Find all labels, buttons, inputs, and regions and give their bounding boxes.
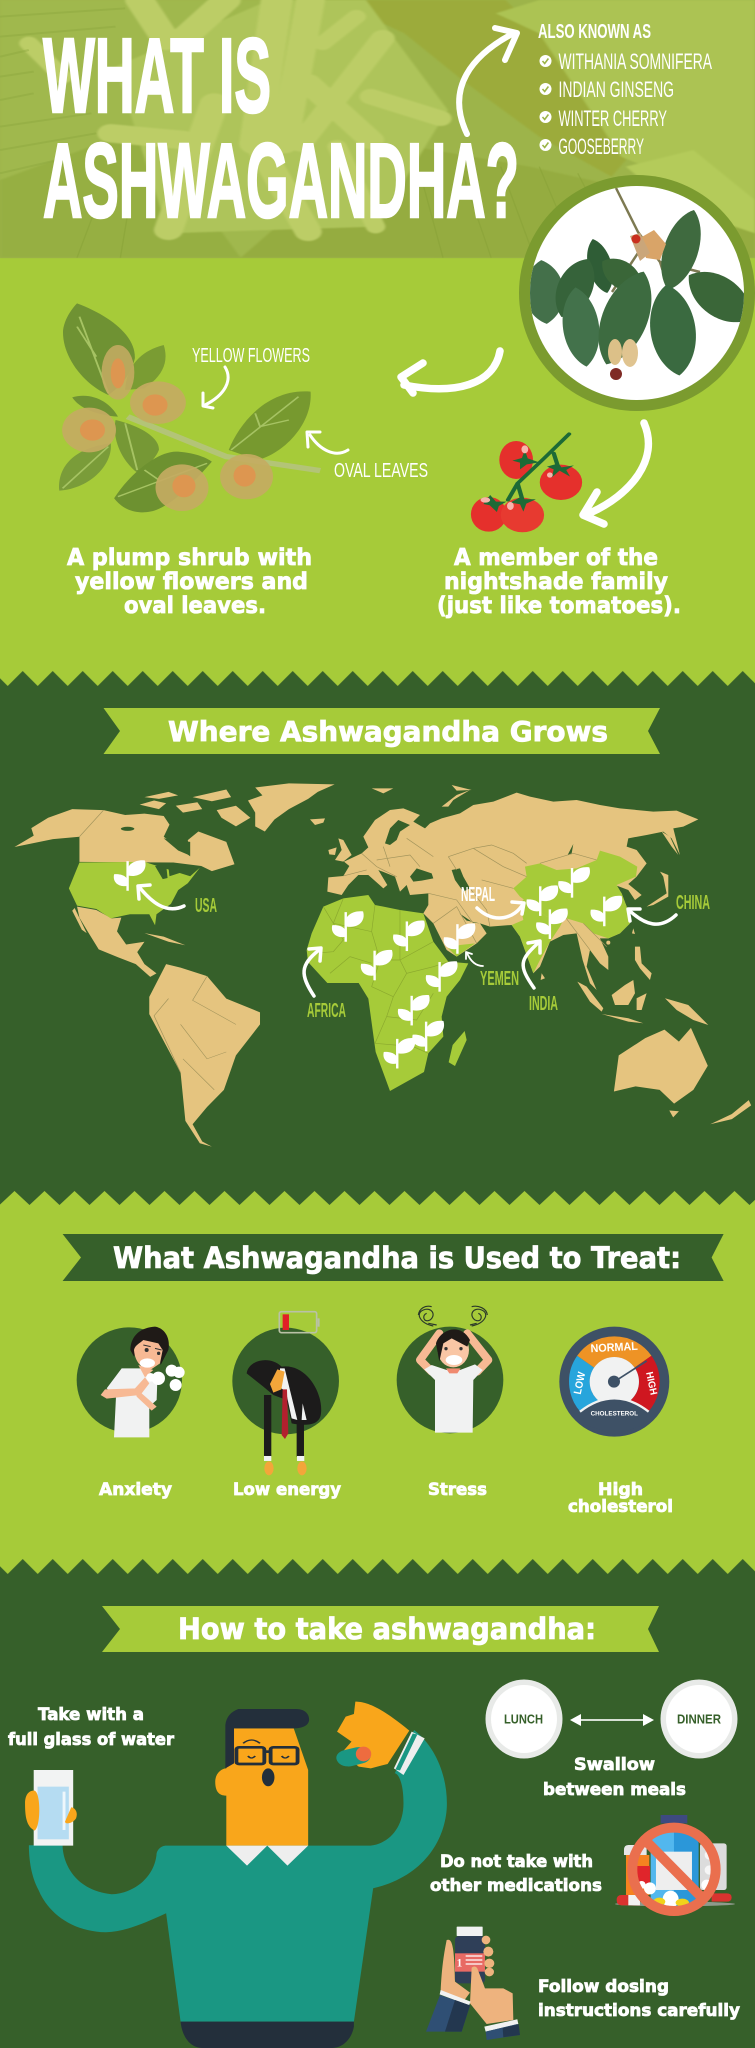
treatment labels: Stress — [428, 1480, 487, 1500]
highlighted: africa — [307, 895, 468, 1091]
label: oval leaves — [307, 432, 428, 482]
treatment labels: cholesterol — [568, 1497, 673, 1517]
treatment labels: High — [598, 1480, 643, 1500]
text: follow dosing instructions: Follow dosing — [538, 1977, 669, 1997]
madagascar — [449, 1031, 467, 1066]
panel: where it grows background — [0, 671, 755, 1205]
hand and pill — [337, 1702, 409, 1768]
highlighted: yemen — [448, 943, 475, 957]
banner: where ashwagandha grows: Where Ashwagandha Grows — [168, 715, 608, 748]
text: swallow between meals: between meals — [543, 1780, 686, 1800]
banner: what ashwagandha is used to treat: What Ashwagandha is Used to Treat: — [113, 1241, 681, 1275]
text: plump shrub — [67, 545, 312, 619]
map labels: INDIA — [529, 993, 558, 1015]
name: indian ginseng — [540, 77, 674, 102]
map labels: NEPAL — [461, 884, 495, 906]
text: full glass of water: Take with a — [38, 1705, 144, 1725]
map labels: YEMEN — [480, 968, 519, 990]
arrow: to tomatoes — [583, 423, 648, 524]
text: follow dosing instructions: instructions carefully — [538, 2001, 740, 2021]
plate: lunch — [486, 1680, 562, 1758]
text: full glass of water: full glass of water — [8, 1730, 175, 1750]
plate: dinner — [660, 1680, 738, 1758]
head and neck — [215, 1728, 308, 1846]
arrow: yemen — [466, 952, 483, 966]
glass of water — [34, 1770, 73, 1846]
name: winter cherry — [540, 106, 667, 131]
icon: no medications — [615, 1815, 735, 1911]
text: swallow between meals: Swallow — [574, 1755, 655, 1775]
banner: where ashwagandha grows — [104, 708, 660, 754]
also known as list — [538, 21, 712, 159]
text: other medications: other medications — [430, 1876, 602, 1896]
sweater — [29, 1730, 447, 2022]
title: WHAT IS — [43, 17, 271, 135]
americas and australia — [14, 783, 751, 1147]
map labels: CHINA — [676, 892, 710, 914]
icon: low energy person — [232, 1312, 339, 1475]
panel: hero photo background — [0, 0, 755, 258]
arrow: between meals — [570, 1714, 654, 1726]
text: full glass of water — [8, 1705, 175, 1750]
map labels: USA — [195, 895, 217, 917]
icon: cholesterol gauge: CHOLESTEROL — [591, 1411, 638, 1418]
map labels: AFRICA — [307, 1000, 346, 1022]
plates: lunch to dinner — [486, 1680, 738, 1758]
illustration: tomatoes — [471, 434, 582, 532]
treatment labels: Low energy — [233, 1480, 341, 1500]
eurasia and africa — [307, 785, 708, 1091]
text: plump shrub: A plump shrub with — [67, 545, 312, 571]
illustration: yellow flowers and oval leaves — [59, 303, 320, 512]
hair — [225, 1709, 309, 1768]
text: other medications: Do not take with — [440, 1852, 593, 1872]
text: plump shrub: oval leaves. — [124, 593, 266, 619]
arrow: oval leaves — [307, 432, 348, 453]
collar — [226, 1846, 308, 1866]
icon: anxiety person — [77, 1327, 185, 1437]
arrow: china — [628, 909, 676, 924]
icon: hand reading dosing label — [426, 1927, 520, 2040]
name: gooseberry: GOOSEBERRY — [558, 134, 644, 159]
text: nightshade family: A member of the — [454, 545, 658, 571]
mouth — [262, 1768, 274, 1786]
arrow: africa — [304, 948, 321, 996]
sprouts: ashwagandha growing sites — [114, 860, 622, 1068]
arrow: to also known as — [459, 28, 517, 134]
text: follow dosing instructions — [538, 1977, 740, 2021]
plate: lunch: LUNCH — [504, 1712, 543, 1726]
banner: how to take ashwagandha: How to take ashwagandha: — [178, 1612, 596, 1646]
arrow: to plant illustration — [401, 351, 500, 393]
text: swallow between meals — [543, 1755, 686, 1800]
waistband — [181, 2022, 354, 2048]
name: indian ginseng: INDIAN GINSENG — [558, 77, 674, 102]
text: nightshade family — [437, 545, 681, 619]
highlighted: china — [513, 851, 637, 938]
map labels — [195, 884, 710, 1022]
title — [43, 17, 519, 240]
treatment labels — [99, 1480, 673, 1517]
text: nightshade family: nightshade family — [444, 569, 668, 595]
also known as list: ALSO KNOWN AS — [538, 21, 651, 43]
plate: dinner: DINNER — [677, 1712, 722, 1726]
label: oval leaves: OVAL LEAVES — [334, 460, 428, 482]
sleeve cuff — [394, 1732, 425, 1775]
arrow: india — [523, 941, 540, 988]
icon: low battery — [279, 1312, 320, 1333]
banner: how to take ashwagandha — [102, 1606, 659, 1652]
icon: cholesterol gauge: NORMAL — [590, 1341, 638, 1355]
text: nightshade family: (just like tomatoes). — [437, 593, 681, 619]
label: yellow flowers — [192, 345, 310, 408]
arrow: nepal — [477, 902, 524, 918]
arrow: yellow flowers — [203, 367, 228, 408]
name: winter cherry: WINTER CHERRY — [558, 106, 667, 131]
icon: cholesterol gauge — [559, 1327, 669, 1437]
treatment labels: Anxiety — [99, 1480, 172, 1500]
photo: ashwagandha plant in circle — [519, 175, 755, 411]
arrow: usa — [138, 885, 184, 909]
text: other medications — [430, 1852, 602, 1896]
panel: how to take background — [0, 1559, 755, 2048]
world map — [14, 783, 751, 1147]
name: gooseberry — [540, 134, 644, 159]
label: yellow flowers: YELLOW FLOWERS — [192, 345, 310, 367]
banner: what ashwagandha is used to treat — [63, 1234, 724, 1281]
icon: cholesterol gauge: LOW — [572, 1370, 588, 1396]
highlighted: india — [512, 897, 565, 973]
icon: stressed person — [397, 1306, 503, 1433]
icon: hand reading dosing label: 1 — [457, 1958, 463, 1970]
glasses — [236, 1747, 298, 1764]
icon: cholesterol gauge: HIGH — [643, 1371, 659, 1396]
text: plump shrub: yellow flowers and — [75, 569, 308, 595]
illustration: man taking a pill — [25, 1702, 447, 2048]
